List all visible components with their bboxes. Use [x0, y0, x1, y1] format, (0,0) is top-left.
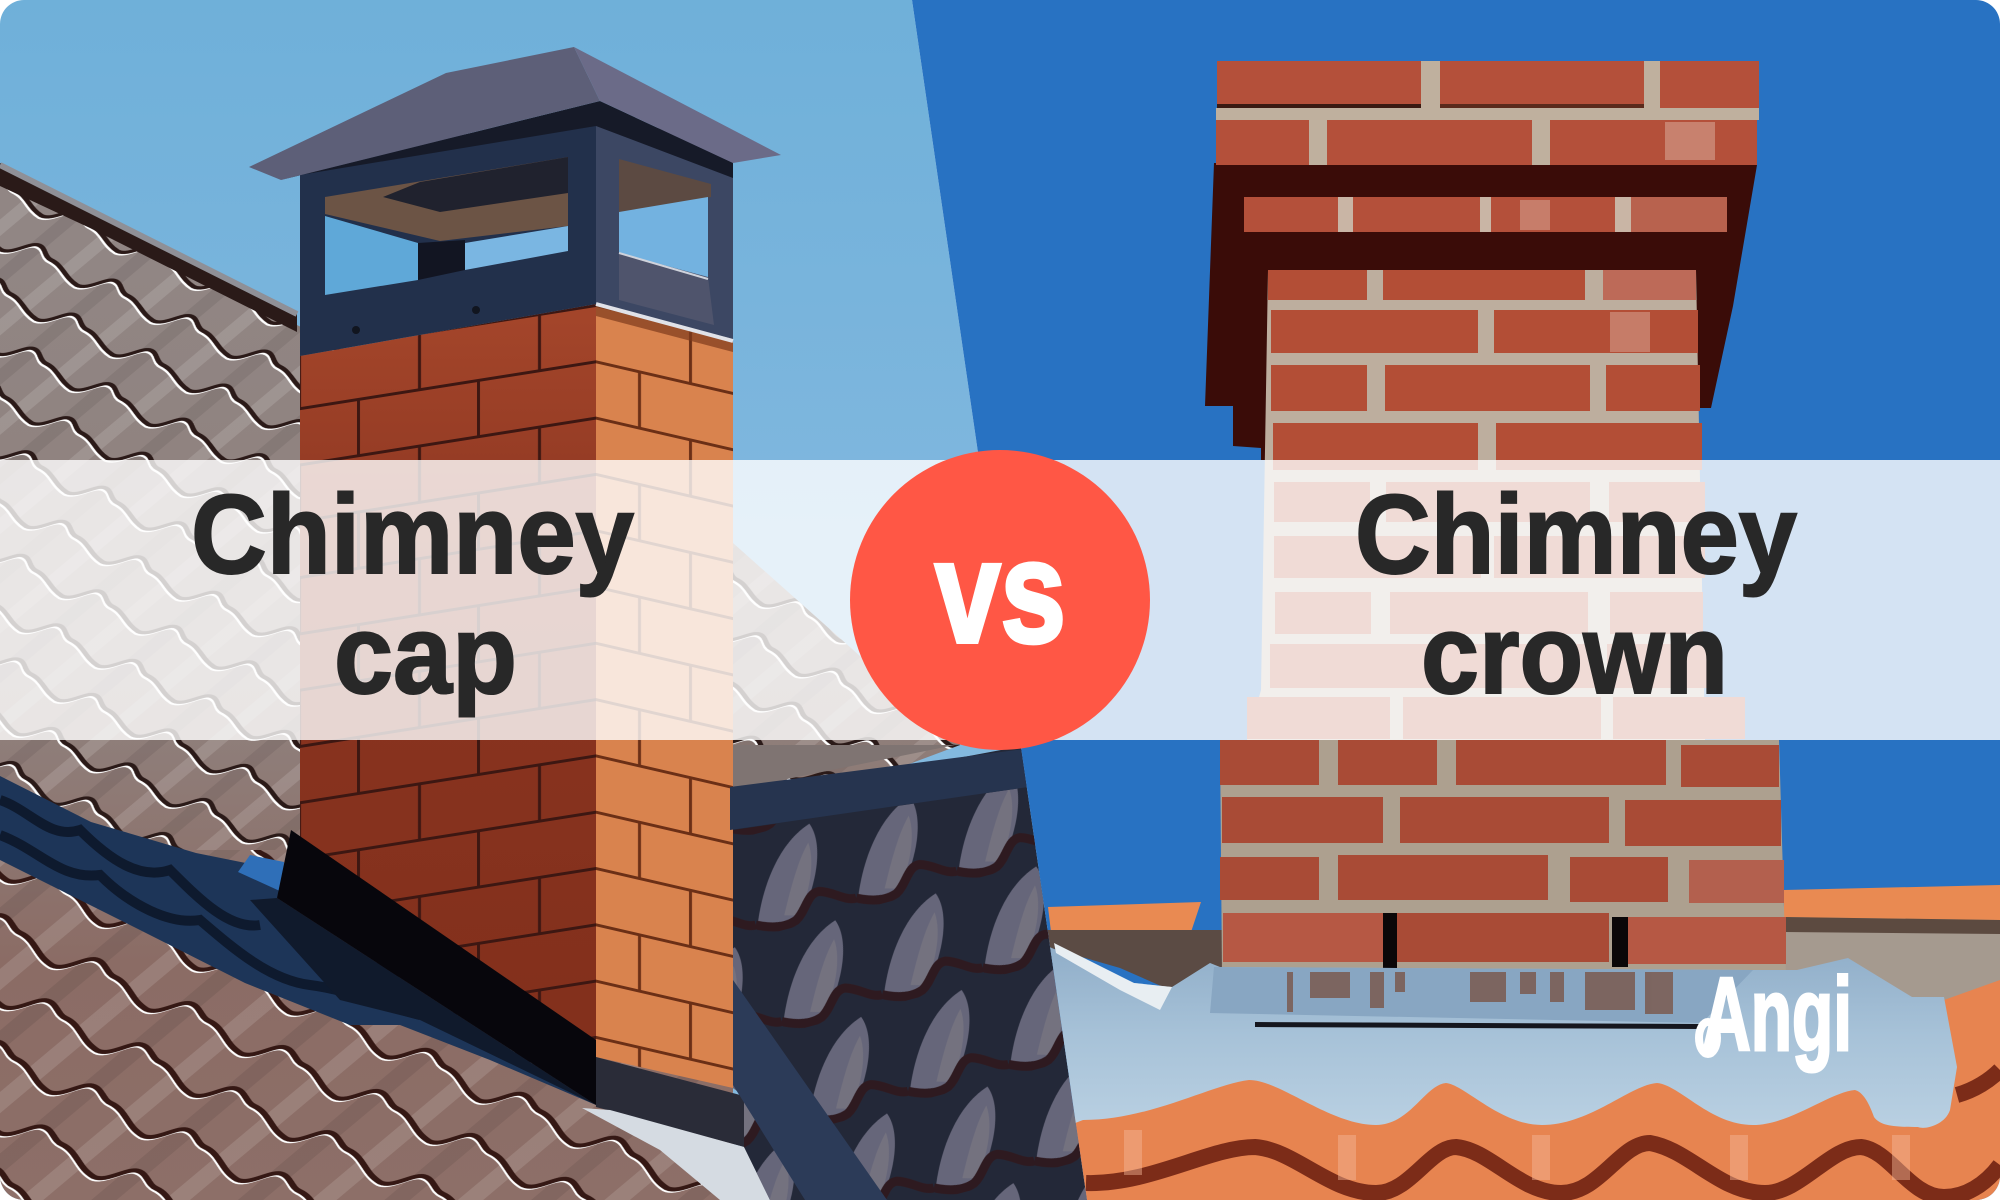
front sky windows: [325, 216, 418, 295]
side opening: [619, 159, 711, 212]
translucent title band: [0, 460, 2000, 740]
black step flashing: [277, 830, 596, 1105]
cap roof front slope: [249, 47, 600, 180]
cap roof side slope: [574, 47, 781, 163]
cap front wall: [300, 110, 596, 356]
crown brick rows: [1216, 61, 1759, 232]
orange tile highlights: [1124, 1130, 1910, 1180]
heading: chimney cap: cap: [334, 592, 517, 717]
chimney front face: [300, 304, 596, 1060]
lead flashing at chimney base: [1040, 943, 1957, 1128]
gutter board: [730, 749, 1028, 830]
cap rivets: [352, 306, 480, 334]
diagonal roof strap: [733, 980, 887, 1200]
tiled roof: [0, 163, 960, 1200]
lower chimney bricks: [1220, 740, 1786, 975]
panel: chimney crown photo: [900, 0, 2000, 1200]
panel: chimney cap photo: [0, 0, 1100, 1200]
light sky background: [0, 0, 1100, 1200]
heading: chimney cap: Chimney: [191, 472, 634, 597]
blue shaded tiles beside the flashing: [0, 776, 596, 1105]
heading: chimney crown: [1358, 490, 1798, 695]
chimney stack bricks: [1247, 270, 1745, 740]
dark tiled roof section: [730, 745, 1087, 1200]
cap eave shadow: [281, 101, 733, 180]
chimney side face: [596, 304, 733, 1088]
worn mortar beside chimney: [1040, 917, 2000, 1000]
orange tile lower scallop shadow: [1086, 1070, 2000, 1197]
vs badge: vs: [935, 510, 1066, 673]
Angi logo: Angi: [1702, 957, 1852, 1073]
metal base flashing: [582, 1057, 790, 1200]
Angi logo: [1695, 973, 1848, 1074]
heading: chimney cap: [191, 472, 634, 717]
orange roof tile base: [1075, 970, 2000, 1200]
front opening interior: [325, 157, 568, 241]
deep blue sky background: [900, 0, 2000, 1200]
cap side wall: [596, 110, 733, 339]
vs badge: [850, 450, 1150, 750]
orange roof ridge tiles: [1048, 885, 2000, 932]
metal cap on chimney: [249, 47, 781, 356]
crown shadow underside: [1205, 163, 1757, 460]
heading: chimney crown: crown: [1421, 592, 1728, 717]
heading: chimney crown: Chimney: [1355, 472, 1797, 597]
